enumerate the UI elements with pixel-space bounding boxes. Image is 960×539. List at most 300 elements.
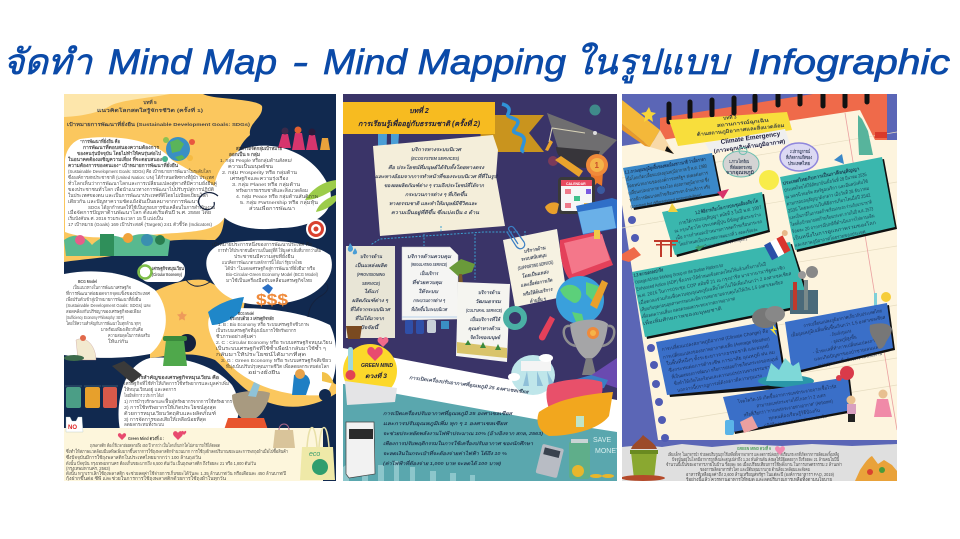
box: 1.2 Kyoto: ภายใต้กรอบอนุสัญญา สมัยที่ 3 ในปี พ.ศ. 1997	[678, 204, 762, 227]
text: green mind note: GREEN MIND ดวงที่ 6	[737, 444, 771, 452]
icon: test tube	[539, 316, 555, 340]
text: SDG definition: ในอนาคตต้องเผชิญความเสี่ยง ที่จะตอบสนอง	[68, 155, 163, 163]
box: climate change: นอกจากนี้ปรากฏการณ์ดังกล่าวมีความรุนแรง	[676, 371, 762, 394]
text: air conditioning savings: จะช่วยประหยัดพลังงานไฟฟ้าประมาณ 10% (อ้างอิงจาก สกล, 2563)	[383, 430, 543, 437]
text: SDG definition: “การพัฒนาที่ยั่งยืน คือ	[80, 137, 120, 145]
note: ecosystem services definition: ความเป็นอยู่ที่ดีขึ้น ซึ่งแบ่งเป็น 4 ด้าน	[391, 208, 480, 216]
text: SDG definition: เดียวกัน และปัญหาความขัดแย้งอันเป็นผลมาจากการพัฒนา	[68, 197, 198, 205]
card: cultural service: (CULTURAL SERVICE)	[466, 308, 502, 314]
icon: storm cloud	[752, 306, 785, 336]
text: BCG model intro: (Sustainable Development Goals: SDGs) และ	[66, 303, 151, 309]
box: 1.3 Paris agreement: เพื่อลดความเสี่ยง ตลอดจนผลกระทบจากสภาพอากาศ	[641, 295, 736, 320]
white blob: circular economy principles	[119, 357, 239, 430]
tag: climate emergency: (ภาวะฉุกเฉินด้านภูมิอากาศ)	[713, 137, 786, 156]
bubble: purple effect: 2.ปรากฏการณ์	[790, 148, 810, 155]
icon: red book	[560, 230, 613, 281]
tag: circular economy: (Circular Economy)	[152, 272, 182, 278]
ruled lines	[622, 132, 897, 420]
text: five target groups: 1. กลุ่ม People หรือกลุ่มด้านสังคม/	[220, 157, 293, 164]
notebook paper	[622, 110, 897, 440]
icon: trophy	[564, 320, 614, 375]
illustration: scientist with fish	[292, 369, 334, 401]
card: provisioning service: ที่ได้จากระบบนิเวศ	[350, 305, 391, 313]
title: -	[292, 43, 308, 82]
card: regulating service: กระบวนการต่าง ๆ	[413, 298, 445, 304]
text: five target groups: 3. กลุ่ม Planet หรือ กลุ่มด้าน	[232, 181, 301, 188]
header: lesson 5: แนวคิดโลกสดใสรู้จักรชีวิต (ครั้งที่ 1)	[97, 106, 204, 115]
box: effects list: - น้ำทะเลที่ทำการเปลี่ยนแปลงภาวะ	[812, 335, 881, 356]
notebook cover: orange	[660, 94, 887, 145]
text: air conditioning savings	[383, 409, 543, 467]
illustration: grey basket with bottle	[224, 382, 270, 430]
banner: lesson title	[343, 102, 544, 152]
box: effects list: การเปลี่ยนแปลงภูมิอากาศเกี่ยวกับประเทศไทย	[803, 307, 883, 329]
decorative squiggle	[199, 193, 218, 210]
card: provisioning service: ได้แก่	[364, 288, 379, 295]
icon: coin jar	[569, 439, 614, 479]
text: BCG national agenda: เป้าหมายประการหนึ่งของการพัฒนาประเทศ คือ	[212, 241, 312, 248]
text: BCG model three parts	[216, 311, 333, 376]
illustration: recycling bins	[65, 386, 118, 408]
text: five target groups: 5. กลุ่ม Partnership หรือ กลุ่มหุ้น	[240, 199, 319, 206]
illustration: figure with plant	[64, 335, 96, 361]
banner: lesson title: บทที่ 2	[409, 105, 429, 115]
text: green mind note: เพียงเล็กๆ ในอาหารนำ ช่วยลดปริมาณถูกใช้เหลือทิ้งจากอาหาร และลดการปล่อยก๊าซเรือนกระจกที่เกิดจากการผลิตและทิ้งเหลือ	[668, 450, 839, 458]
text: BCG model intro: BCG Model	[78, 279, 97, 285]
box: effects list: - อุณหภูมิสูงขึ้น	[830, 332, 858, 345]
card: supporting service: และเอื้อต่อการเกิด	[520, 275, 554, 289]
tag: circular economy: เศรษฐกิจหมุนเวียน	[152, 265, 185, 272]
note: ecosystem services definition: และทางอ้อมจากการทำหน้าที่ของระบบนิเวศ ที่ที่ในรูป	[375, 172, 498, 180]
green mind note box: ดังนั้น ปัจจุบัน กรุงเทพมหานคร ต้องเก็บขยะมากถึง 6,500 ตัน/วัน เป็นถุงพลาสติก ถึงร้อยละ 21 หรือ 1,800 ตัน/วัน	[66, 459, 257, 467]
icon: torii gate	[654, 240, 678, 257]
text: five target groups: ส่วนเพื่อการพัฒนา	[249, 205, 295, 212]
band: teal footer	[343, 384, 617, 481]
box: effects list: และเกิดปัญหาของป่าชายเลนและ	[814, 344, 882, 363]
card: cultural service	[456, 282, 510, 362]
text: BCG model intro: ที่การพัฒนาต่อยอดจากจุดแข็งของประเทศ	[66, 289, 150, 297]
box: 1.3 right: และเป็นภาคีในการลดก๊าซเรือนกระจก ร่วมกับนานาชาติ	[789, 197, 873, 221]
note: ecosystem services definition: ทางธรรมชาติ และทำให้มนุษย์มีชีวิตและ	[389, 200, 477, 207]
text: BCG model intro: (Sufficiency Economy Philosophy: SEP)	[66, 315, 124, 321]
banner: lesson heading: ด้านสถานภูมิอากาศและสิ่งแวดล้อม	[696, 121, 785, 139]
text: five target groups: ออกเป็น 5 กลุ่ม	[229, 150, 260, 158]
text: green mind note	[666, 444, 842, 483]
box: 1.3 right	[780, 157, 897, 252]
box: effects list: - พายุรุนแรงที่สร้างความเสียหาย	[815, 350, 883, 370]
icon: water drops	[348, 243, 357, 254]
card: supporting service	[503, 229, 567, 307]
box: covid: ทุกคนต้องเรียนรู้วิธีป้องกัน	[768, 407, 821, 422]
text: air conditioning savings: และการปรับอุณหภูมิเพิ่ม ทุก ๆ 1 องศาเซลเซียส	[383, 419, 508, 427]
title: Infographic	[748, 43, 951, 82]
green mind note box: ซึ่งทำให้สภาพแวดล้อมมีมลพิษเพิ่มมากขึ้นจากการใช้ถุงพลาสติกจำนวนมาก การใช้ถุงผ้าลดปริมาณขยะและการพกถุงผ้าเมื่อไปซื้อสินค้า	[66, 447, 288, 455]
text: air conditioning savings: จะลดเงินในกระเป๋าที่จะต้องจ่ายค่าไฟฟ้า ได้ถึง 10 %	[383, 449, 508, 457]
box: 1.3 right: และสภาพภูมิอากาศโดยรวมของประเทศ	[794, 228, 866, 249]
text: circular economy principles: 1) การบำรุงรักษาและฟื้นฟูทรัพยากรจากการใช้ทรัพยากร	[124, 397, 232, 405]
text: BCG model three parts: 3. G : Green Economy หรือ ระบบเศรษฐกิจสีเขียว	[221, 357, 331, 364]
illustration: stack of books	[537, 375, 613, 436]
box: effects list: - ภัยแล้งรุนแรง	[829, 327, 852, 338]
bubble: purple effect	[780, 143, 818, 171]
card: cultural service: คุณค่าทางด้าน	[468, 325, 501, 332]
icon: paper clip	[507, 227, 525, 249]
tag: circular economy	[138, 261, 185, 282]
text: BCG national agenda: มาใช้เป็นเครื่องมือขับเคลื่อนเศรษฐกิจไทย	[226, 276, 312, 284]
box: covid: สามารถแพร่กระจายได้ไกลกว่า 2 เมตร	[756, 392, 827, 410]
banner: lesson heading: สถานการณ์ฉุกเฉิน	[716, 116, 770, 129]
icon: thermometer and sun	[872, 292, 891, 316]
bubble: cloud cause: จากอุณหภูมิ	[726, 169, 754, 177]
arrow: down to BCG model	[308, 283, 328, 317]
title: จัดทำ	[3, 43, 93, 82]
note: ecosystem services definition: คือ ประโยชน์ที่มนุษย์ได้รับทั้งโดยทางตรง	[388, 163, 485, 171]
green mind note box: ถุงพลาสติก ต้องใช้เวลาย่อยสลายถึง 450 ปี หากว่า เป็นโลกเก็บเท่าใดไม่สามารถใช้ได้ตลอด	[90, 441, 220, 449]
card: supporting service: โดยเป็นแหล่ง	[521, 268, 550, 280]
box: 1.3 right: เป็นหนึ่งในการดูแลภาพรวมของโลก	[793, 218, 877, 242]
icon: eco tote bag: eco	[309, 451, 320, 458]
text: BCG national agenda: ประชาชนมีความสุขที่ยั่งยืน	[234, 253, 295, 260]
box: 1.3 right: ร้อยละ 20 จากกรณีปกติที่ดำเนินการไปตามเดิม	[791, 212, 875, 235]
bubble: cloud cause: 1.ภาวะโลกร้อน	[729, 158, 749, 165]
box: 1.2 Kyoto: 1.2 พิธีสารเกียวโต การประชุมเมืองเกียวโต	[695, 197, 759, 216]
decoration: circles	[548, 104, 605, 194]
box: climate change: ที่เป็นผลของการพัฒนา หรือการปล่อยก๊าซเรือนกระจกของมนุษย์	[671, 354, 779, 381]
text: BCG model three parts: ที่มุ่งเน้นปรับปรุงคุณภาพชีวิต เพื่อลดผลกระทบต่อโลก	[226, 363, 329, 370]
green mind note box: (กรุงเทพมหานคร, 2563)	[66, 466, 110, 472]
box: 1.3 Paris agreement: 1.3 ความตกลงปารีส	[633, 266, 664, 279]
text: five target groups: ทรัพยากรธรรมชาติและสิ่งแวดล้อม	[236, 187, 308, 194]
connector lines	[372, 226, 525, 280]
banner: lesson heading	[669, 112, 792, 146]
white blob: BCG model three parts	[208, 308, 336, 395]
illustration: blue whale bottle	[208, 297, 244, 325]
arrow: circular economy to BCG	[186, 280, 210, 286]
note: ecosystem services definition	[373, 135, 505, 236]
text: BCG model intro: เป็นแนวทางในการพัฒนาเศรษฐกิจ	[73, 283, 131, 291]
text: BCG national agenda: Bio-Circular-Green Economy Model (BCG Model)	[226, 272, 318, 278]
box: 1.3 Paris agreement: เทียบกับยุคก่อนอุตสาหกรรมและมีความพยายามควบคุมไม่ให้เกิน 1.5 องศาเซลเซียส	[640, 279, 783, 313]
decoration: tape	[378, 134, 399, 166]
box: covid: ปฏิบัติตามมาตรการอย่างเคร่งครัด	[763, 414, 828, 430]
text: air conditioning heading: การเปิดเครื่องปรับอากาศที่อุณหภูมิ 25 องศาเซลเซียส	[409, 373, 530, 396]
text: SDG definition: ทั่วโลกเห็นว่าการพัฒนาโลกและการเปลี่ยนแปลงสู่ทางที่มีความยั่งยืนคู่	[68, 179, 217, 187]
icon: thermometer	[346, 347, 356, 380]
card: regulating service: ที่ช่วยควบคุม	[412, 278, 443, 286]
text: circular economy principles: ให้หมุนเวียนอยู่ และลดการ	[124, 386, 176, 393]
band: white diagonal	[343, 348, 617, 440]
box: covid: โรคโควิด-19 เกิดขึ้นจากการแพร่กระจายจากเชื้อไวรัส	[737, 382, 837, 405]
box: climate change: ในพื้นที่หนึ่งๆ ทั้งระยะยาวจากธรรมชาติ และมนุษย์	[666, 341, 770, 367]
text: BCG model three parts: กลับมาให้ประโยชน์ได้มากที่สุด	[216, 351, 306, 358]
bubble: purple effect: ที่เกิดจากแก๊สของ	[786, 153, 812, 161]
note: ecosystem services definition: ของผลผลิตภัณฑ์ต่าง ๆ รวมถึงประโยชน์ที่ได้จาก	[384, 181, 485, 189]
card: supporting service: บริการด้าน	[523, 244, 547, 255]
green mind note box	[64, 428, 323, 482]
text: BCG national agenda	[212, 241, 321, 284]
illustration: water filters	[402, 317, 462, 334]
green mind badge	[343, 337, 397, 398]
white blob: definition of SDGs	[65, 137, 226, 238]
text: circular economy principles: หลักการสำคัญของเศรษฐกิจหมุนเวียน คือ	[124, 374, 219, 381]
icon: group of people	[278, 126, 330, 150]
text: SDG definition: ความต้องการของตนเอง” เป้าหมายการพัฒนาที่ยั่งยืน	[68, 161, 179, 169]
box: 1.1 greenhouse: โดยหน่วยงานขององค์การสหรัฐฯ ส่งผลต่อการ	[626, 169, 709, 190]
box: 1.1 greenhouse: 1.1 ภาวะอุณหภูมิสูงขึ้นของพลเมืองชาวนาซี ว่าเมื่อราคา	[624, 155, 707, 177]
icon: yellow star	[641, 107, 656, 122]
card: regulating service	[402, 247, 458, 320]
text: five target groups: 4. กลุ่ม Peace หรือ กลุ่มด้านสันติภาพ	[236, 193, 318, 200]
card: supporting service: (SUPPORTING SERVICE)	[517, 260, 554, 272]
icon: calculator	[535, 444, 564, 478]
text: circular economy principles: ลดผลกระทบทั้งระบบ	[124, 420, 164, 428]
text: BCG national agenda: การทำให้ประชาชนมีความเป็นอยู่ที่ดี ให้มูลค่าเพิ่มที่มากกว่าเดิม	[218, 246, 321, 254]
text: save money: SAVE	[593, 437, 611, 444]
icon: portable air conditioner	[346, 422, 375, 478]
text: BCG national agenda: ได้นำ “โมเดลเศรษฐกิจสู่การพัฒนาที่ยั่งยืน” หรือ	[224, 265, 315, 272]
icon: hand sanitizer	[725, 416, 758, 435]
title: Mind Mapping	[323, 43, 567, 82]
icon: dollars and running person: $$$	[256, 292, 288, 309]
box: covid	[723, 377, 854, 434]
card: provisioning service: ที่ไม่ได้มาจาก	[355, 314, 385, 322]
box: 1.1 greenhouse: หากมีการพัฒนาลดก๊าซเรือนกระจก ด้านบริการ หรือ	[629, 183, 711, 204]
text: circular economy principles: 3) การจัดการของเสียให้เหลือน้อยที่สุด	[124, 416, 206, 423]
note: ecosystem services definition: บริการทางระบบนิเวศ	[411, 147, 462, 153]
card: provisioning service: (PROVISIONING	[357, 272, 385, 278]
text: BCG model three parts: เป็นระบบเศรษฐกิจที่ใช้ซ้ำเพื่อนำกลับมาใช้ซ้ำ ๆ	[216, 344, 326, 352]
illustration: factory	[790, 266, 818, 314]
text: green mind note: ปัจจุบันอยู่ในโลกมีอาหารถูกทิ้งและสูญเปล่าถึง 1.34 พันล้านตัน ส่งผลให้มีผู้อดอยาก ถึงร้อยละ 21 ล้านคนในปีนี้	[672, 455, 840, 463]
green mind badge: GREEN MIND	[361, 363, 393, 369]
panel: lesson 5 sustainability mind map	[64, 94, 337, 482]
bubble: cloud cause	[723, 148, 759, 177]
text: circular economy principles: ด้วยการหมุนเวียนวัตถุดิบและผลิตภัณฑ์	[124, 410, 216, 417]
box: climate change: การเปลี่ยนแปลงของสภาพอากาศเฉลี่ย (Average Weather)	[663, 335, 770, 361]
text: circular economy principles: 2) การใช้ทรัพยากรให้เกิดประโยชน์สูงสุด	[124, 404, 216, 411]
icon: french flag	[762, 229, 796, 260]
box: 1.2 Kyoto	[662, 192, 770, 257]
text: SDG definition: เริ่มบังคับพ.ศ. 2016 รวมระยะเวลา 15 ปี แบ่งเป็น	[68, 214, 164, 222]
card: cultural service: จิตใจของมนุษย์	[470, 334, 502, 341]
green mind note box: ดังนั้น หากเราเลิกใช้ถุงพลาสติก จะช่วยลดค่าใช้จ่ายการเก็บขยะได้วันละ 1.35 ล้านบาท/วัน หรือเดือนละ 450 ล้านบาท/ปี	[66, 469, 286, 477]
icon: tan recycle tote	[273, 424, 295, 448]
text: BCG model intro: มาพร้อมเพียงเดียวกันคือ	[101, 326, 143, 333]
card: provisioning service: บริการด้าน	[360, 253, 383, 260]
text: circular economy principles: เศรษฐกิจที่ใช้ทำให้เกิดการใช้ทรัพยากรและมูลค่าเพิ่ม	[124, 380, 229, 387]
box: covid: หรือที่เรียกว่า “การแพร่กระจายทางอากาศ” (Airborne)	[743, 398, 834, 419]
box: 1.3 right: ตามกรอบอนุสัญญาดังกล่าว เมื่อวันที่ 28 ธันวาคม	[786, 185, 870, 208]
note: ecosystem services definition: กระบวนการต่าง ๆ ที่เกิดขึ้น	[405, 190, 468, 198]
icon: statue of liberty	[858, 115, 873, 155]
card: cultural service: บริการด้าน	[478, 289, 501, 296]
box: 1.2 Kyoto: เมื่อ การกำหนดเป้าหมายการลดก๊าซเรือนกระจก	[675, 218, 763, 242]
illustration: girl with mask	[874, 390, 892, 417]
card: supporting service: ด้านอื่น ๆ	[529, 294, 546, 305]
text: SDG definition	[68, 137, 217, 228]
green mind badge: ดวงที่ 3	[365, 371, 388, 380]
box: climate change	[656, 320, 788, 397]
icon: green mind heart	[775, 446, 785, 455]
box: 1.3 right: ประเทศไทยได้ให้สัตยาบันเมื่อวันที่ 28 มีนาคม 2535	[783, 171, 867, 194]
icon: orange star	[177, 311, 187, 320]
text: SDG definition: ในประเทศของตน และเป็นการพัฒนาประเทศที่ดีโดยไม่เบียดเบียนโลก	[68, 191, 208, 199]
icon: globe	[556, 276, 608, 324]
card: provisioning service: ปัจจัยนี้	[360, 323, 380, 331]
tag: climate emergency	[705, 129, 790, 156]
green mind note box: กุ้งฝากขึ้นต่อ ซีพี และช่วยในการการใช้ถุงพลาสติกด้วยการใช้ถุงผ้าในทุกวัน	[66, 474, 227, 482]
text: SDG definition: SDGs ได้ถูกกำหนดให้ใช้เป็นกรอบการขับเคลื่อนในการดำเนินงาน	[88, 203, 216, 211]
icon: target	[306, 219, 326, 239]
icon: eraser	[622, 247, 641, 262]
box: 1.3 Paris agreement: เพื่อเพิ่มศักยภาพของมนุษยชาติ	[642, 305, 722, 327]
box: 1.2 Kyoto: ณ กรุงเกียวโต ประเทศญี่ปุ่น มีข้อผูกพันระหว่าง	[674, 211, 761, 235]
box: 1.3 right: ณ นครนิวยอร์ค สหรัฐอเมริกา และมีผลบังคับใช้	[785, 178, 869, 201]
text: BCG model intro: โดยให้ความสำคัญกับการพัฒนาในทุกด้าน ทุกๆ	[66, 320, 141, 327]
icon: orange badge: 1	[594, 161, 600, 170]
text: circular economy principles	[124, 374, 232, 428]
text: SDG definition: ของประชาชนทั่วโลก เพื่อนำแนวทางการพัฒนาไปปรับรูปสู่การปฏิบัติ	[68, 186, 214, 193]
decoration: blue squiggle	[502, 104, 524, 152]
note: ecosystem services definition: (ECOSYSTEM SERVICES)	[411, 156, 459, 162]
text: SDG definition: ของคนรุ่นปัจจุบัน โดยไม่ทำให้คนรุ่นต่อไป	[77, 150, 161, 157]
icon: no plastic bag: NO	[68, 425, 77, 431]
text: BCG model intro: ให้แก่กัน	[108, 338, 129, 345]
icon: big pencil	[622, 100, 674, 154]
text: air conditioning savings: เพียงการปรับพฤติกรรมในการใช้เครื่องปรับอากาศ ของนักศึกษา	[383, 439, 533, 447]
text: SDG definition: การพัฒนาที่ตอบสนองความต้องการ	[83, 143, 159, 151]
icon: folder	[545, 198, 618, 235]
text: BCG model three parts: BCG Model	[238, 311, 254, 317]
icon: graduation cap	[545, 113, 617, 168]
bubble: cloud cause: ที่ส่งผลกระทบ	[730, 163, 752, 171]
icon: hearts	[118, 431, 186, 440]
text: BCG model three parts: ประกอบด้วย 3 เศรษฐกิจหลัก	[230, 315, 274, 322]
text: green mind note: อาหารที่เหลือมูลค่าถึง 2,600 ล้านเหรียญสหรัฐฯ ในแต่ละปี (องค์การอาหารฯ FAO, 2019)	[686, 471, 834, 478]
title	[3, 42, 951, 84]
text: BCG model three parts: 2. C : Circular Economy หรือ ระบบเศรษฐกิจหมุนเวียน	[216, 339, 333, 346]
box: 1.3 Paris agreement: Ussege Ad Hoc Working Group on the Durban Platform for	[635, 263, 724, 286]
text: BCG model three parts: 1. B : Bio Economy หรือ ระบบเศรษฐกิจชีวภาพ	[218, 321, 309, 328]
banner: lesson title: การเรียนรู้เพื่ออยู่กับธรรมชาติ (ครั้งที่ 2)	[358, 118, 481, 128]
header: lesson 5: บทที่ 5	[143, 98, 157, 106]
illustration: green bin mascot	[163, 334, 196, 366]
decoration: purple triangle	[587, 358, 617, 388]
icon: wood bucket	[346, 326, 362, 339]
illustration: vegetables	[855, 456, 897, 481]
card: regulating service: ที่เกิดขึ้นในระบบนิเวศ	[411, 305, 448, 313]
title: ในรูปแบบ	[575, 42, 732, 84]
header: lesson 5: เป้าหมายการพัฒนาที่ยั่งยืน (Sustainable Development Goals: SDGs)	[67, 120, 250, 128]
icon: sun	[759, 170, 779, 190]
icon: compost bin	[621, 435, 665, 481]
banner: lesson heading: บทที่ 3	[723, 112, 737, 122]
text: green mind note: รู้อย่างนี้แล้ว ควรทานอาหารให้หมด และลดปริมาณการเหลือทิ้งตามนโยบาย	[686, 475, 832, 483]
box: 1.3 right: โดยตั้งเป้าหมายลดก๊าซเรือนกระจก ภายในปี พ.ศ. 2573	[790, 204, 874, 228]
text: air conditioning savings: การเปิดเครื่องปรับอากาศที่อุณหภูมิ 25 องศาเซลเซียส	[383, 409, 513, 417]
box: climate change: การเปลี่ยนแปลงสภาพภูมิอากาศ (Climate Change) คือ	[661, 327, 769, 353]
text: save money: MONEY	[595, 448, 621, 455]
text: SDG definition: (Sustainable Development Goals: SDGs) คือ เป้าหมายการพัฒนาในระดับโลก	[68, 168, 211, 175]
tag: climate emergency: Climate Emergency	[720, 131, 781, 146]
box: 1.1 greenhouse: เปลี่ยนแปลงอากาศ ของโลก ต่อสภาพภูมิอากาศ ซึ่ง	[628, 176, 710, 197]
text: circular economy principles: โดยมีหลักการ 3 ประการ ได้แก่	[124, 392, 164, 399]
text: BCG model intro: เพื่อปรับตัวเข้าสู่เป้าหมายการพัฒนาที่ยั่งยืน	[66, 296, 142, 303]
white blob: BCG model intro	[64, 271, 166, 358]
icon: tornado	[870, 323, 892, 349]
icon: ice floe	[758, 358, 814, 387]
card: regulating service: (REGULATING SERVICE)	[411, 262, 447, 268]
text: five target groups: 2. กลุ่ม Prosperity หรือ กลุ่มด้าน	[222, 169, 298, 176]
text: SDG definition: ซึ่งองค์การสหประชาชาติ (United Nation: UN) ได้กำหนดทิศทางที่ผู้นำ ประเทศ	[68, 174, 214, 181]
card: regulating service: ให้ระบบ	[418, 288, 439, 295]
icon: eco tote bag	[300, 428, 335, 480]
text: save money	[593, 437, 621, 455]
icon: tree	[449, 259, 475, 294]
text: green mind note: จำนวนนี้เป็นขยะอาหารภายในบ้าน ร้อยละ 56 เมื่อเปรียบเทียบการใช้พลังงาน ในการเกษตรกรรม 2 ล้านเท่า	[666, 460, 842, 468]
heading: Green Mind: Green Mind ดวงที่ 4 :	[128, 434, 164, 442]
text: SDG definition: 17 เป้าหมาย (Goals) 169 เป้าประสงค์ (Targets) 241 ตัวชี้วัด (Indicators)	[68, 220, 212, 228]
margin line	[845, 113, 897, 430]
box: 1.3 Paris agreement: เมื่อตกลงร่วมกันเพื่อควบคุมอุณหภูมิเฉลี่ยโลกไม่ให้เพิ่มเกินกว่า 2 องศาเซลเซียส	[638, 270, 792, 306]
box: 1.3 Paris agreement: พ.ศ. 2015 ในการประชุม COP สมัยที่ 21 ณ กรุงปารีส มาจากนานารัฐสมาชิก	[637, 264, 786, 300]
icon: pencil	[555, 156, 583, 177]
text: BCG model intro: สอดคล้องกับปรัชญาของเศรษฐกิจพอเพียง	[66, 308, 141, 315]
box: effects list: เมื่ออุณหภูมิเฉลี่ยเพิ่มขึ้นเกินกว่า 1.5 องศาเซลเซียส	[790, 313, 886, 339]
green mind note box: ซึ่งปัจจุบันมีการใช้ถุงพลาสติกในประเทศไทยมากกว่า 100 ล้านถุง/วัน	[66, 454, 202, 461]
card: cultural service: เป็นบริการที่ให้	[470, 315, 501, 323]
box: 1.3 Paris agreement: Enhanced Action (ADP) ซึ่งเจรจาให้ทำหนดข้อตกลงใหม่ให้แล้วเสร็จภายในปี	[636, 260, 767, 293]
icon: red corner block	[875, 132, 887, 138]
illustration: AC cloud	[508, 354, 555, 395]
text: five target groups: สามารถจัดกลุ่มเป้าหมาย	[236, 145, 282, 152]
box: 1.3 right: 2535 โดยลงนามในพิธีสารเกียวโตเมื่อปี 2542	[787, 191, 871, 214]
notebook holes	[628, 216, 669, 442]
illustration: boy with mask	[846, 396, 856, 422]
spiral rings	[669, 93, 867, 122]
box: 1.2 Kyoto: โดยเป้าหมายการลดก๊าซจากกลุ่มที่ 1	[697, 235, 748, 252]
card: provisioning service	[346, 246, 395, 338]
text: five target groups: ความเป็นมนุษย์ชน	[228, 162, 274, 170]
icon: no plastic bag	[66, 417, 83, 432]
decoration: footer stripes	[343, 459, 475, 481]
box: 1.1 greenhouse: (common but differentiated responsibilities)	[630, 193, 702, 210]
card: supporting service: ระบบสนับสนุน	[520, 252, 548, 263]
white blob: five target groups	[214, 146, 331, 229]
box: climate change: ซึ่งทำให้เกิดโลกร้อนและความแปรปรวนทางธรรมชาติ	[673, 363, 773, 387]
title: Mind Map	[108, 43, 277, 82]
icon: calendar: CALENDAR	[566, 182, 586, 186]
icon: wall air conditioner	[345, 381, 397, 405]
text: air conditioning savings: (ค่าไฟฟ้าที่ต้องจ่าย 1,000 บาท จะลดได้ 100 บาท)	[383, 459, 501, 467]
box: 1.3 right: ประเทศไทยกับการเป็นภาคีอนุสัญญา	[782, 164, 860, 187]
text: BCG model intro: ความสมดุลในการส่งเสริม	[108, 332, 150, 339]
panel: lesson 2 ecosystem services	[343, 94, 621, 481]
white blob: BCG national agenda	[206, 241, 332, 305]
card: regulating service: เป็นบริการ	[420, 270, 439, 277]
box: 1.1 greenhouse: เมื่อโลกเกิดเปลี่ยนแปลงอุณหภูมิอากาศ ปี พ.ศ. 1980	[625, 162, 708, 183]
box: 1.1 greenhouse	[623, 153, 722, 210]
paper plane and decorations	[668, 154, 844, 251]
torn grey footer	[622, 444, 897, 481]
card: provisioning service: ผลิตภัณฑ์ต่าง ๆ	[352, 297, 388, 304]
header: lesson 5	[67, 98, 250, 128]
card: regulating service: บริการด้านควบคุม	[407, 253, 452, 260]
text: BCG model three parts: ชีวภาพอย่างคุ้มค่า	[216, 333, 256, 340]
box: effects list	[785, 303, 895, 374]
text: BCG national agenda: แนวคิดการพัฒนาตามหลักการนี้ ได้แก่ รัฐบาลไทย	[222, 258, 302, 266]
box: 1.3 Paris agreement	[632, 242, 812, 339]
